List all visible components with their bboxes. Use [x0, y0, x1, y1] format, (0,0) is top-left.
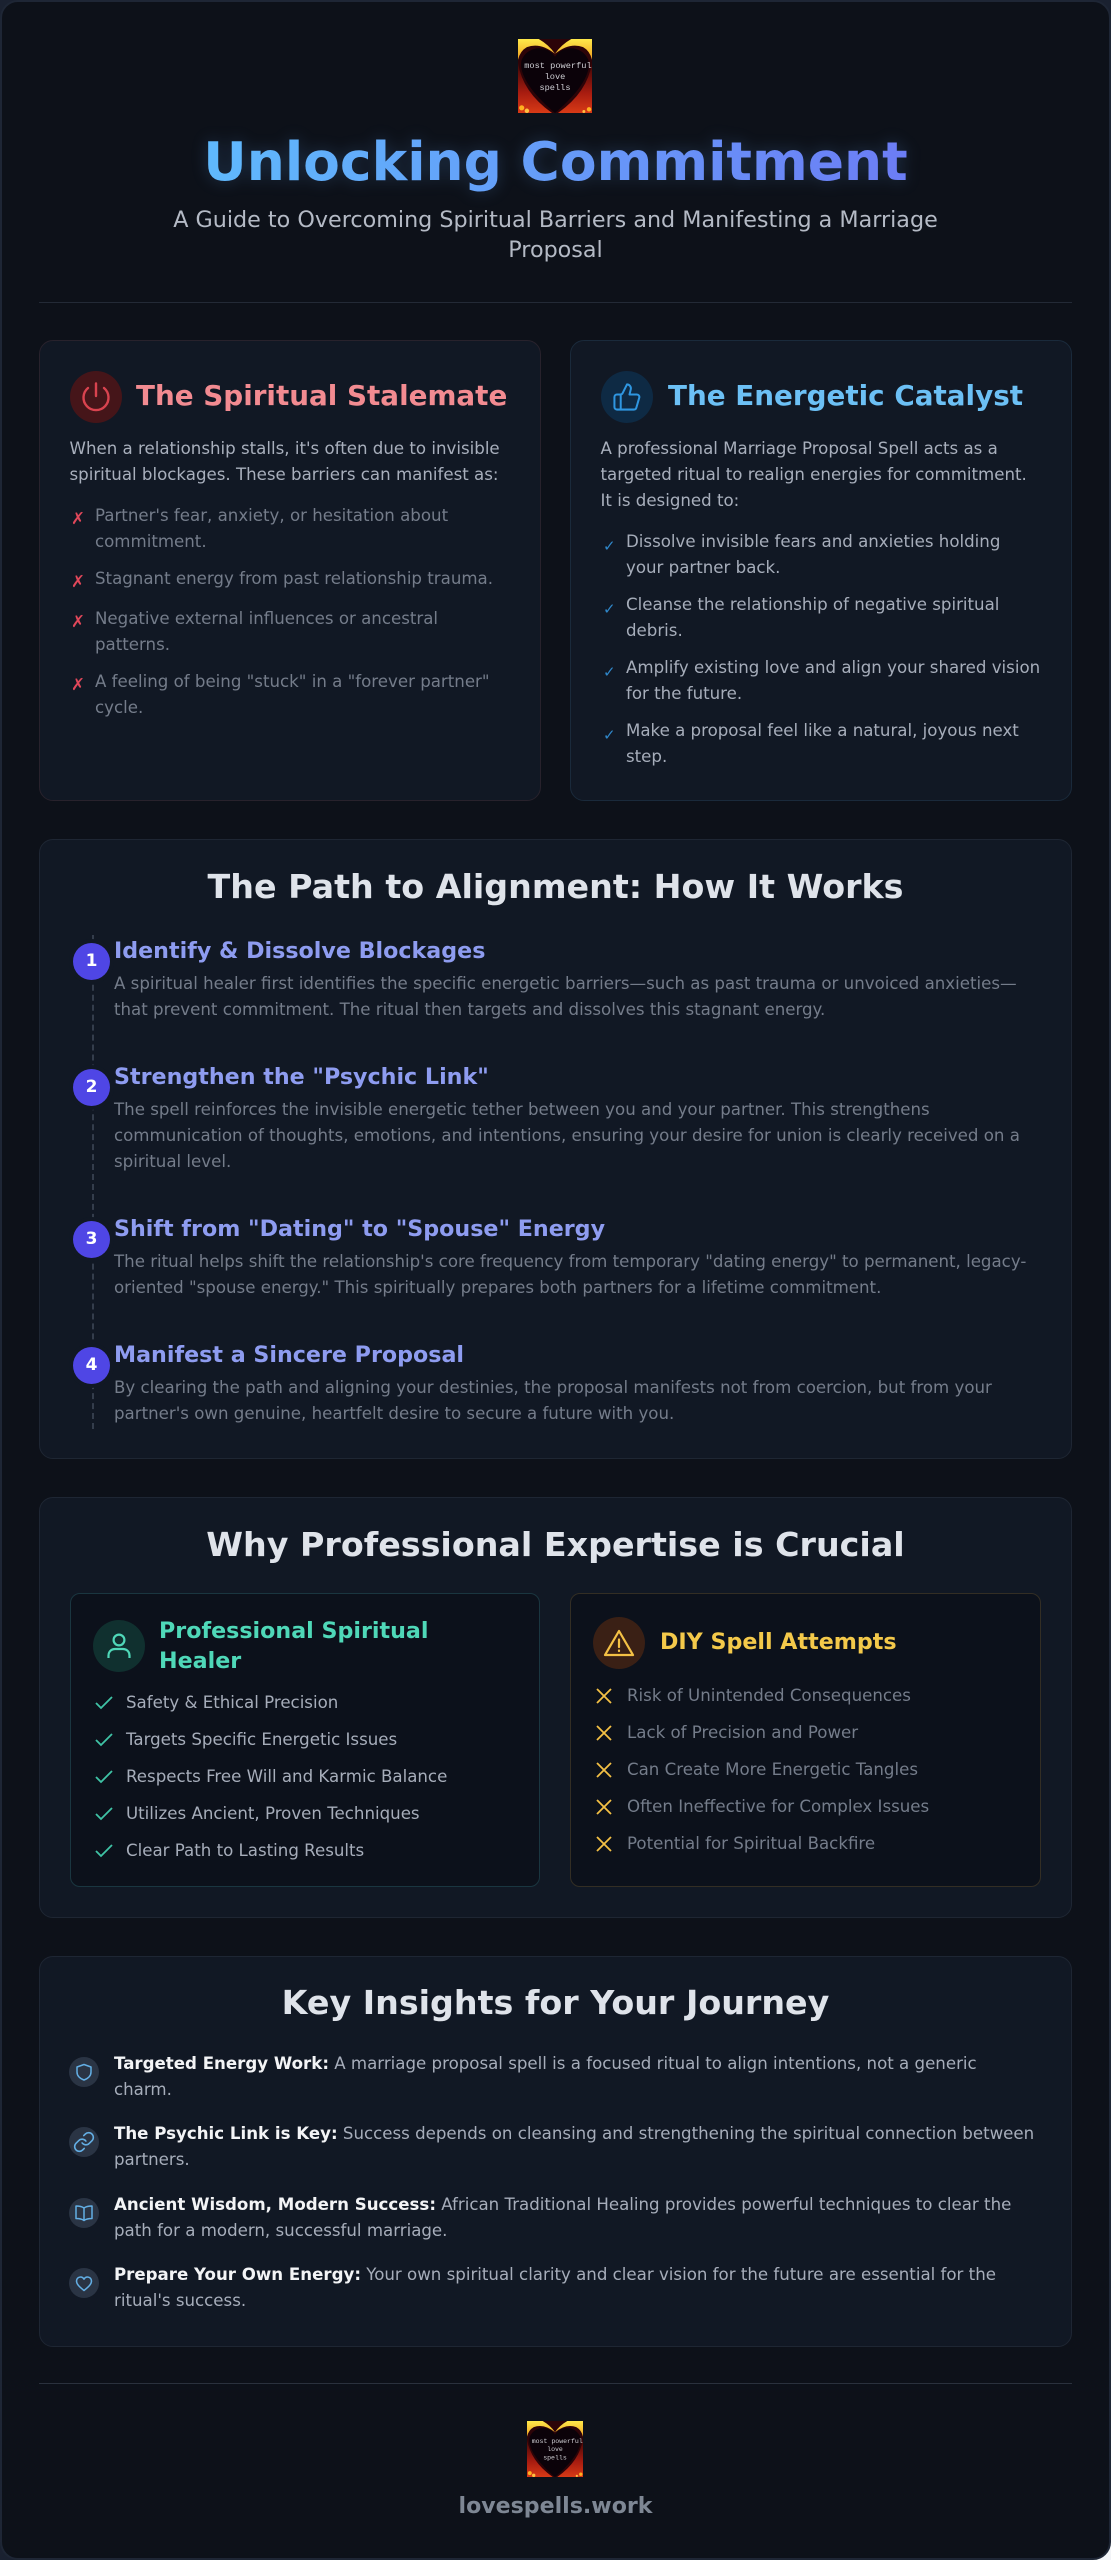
card: diy spell attempts [570, 1593, 1041, 1887]
intro text: stalemate: spiritual blockages. These barriers can manifest as: [70, 465, 498, 484]
step 3 [73, 1216, 1026, 1297]
step 3: oriented "spouse energy." This spiritually prepares both partners for a lifetime commitment. [114, 1278, 881, 1297]
insight 4 [69, 2265, 996, 2310]
insight 4: ritual's success. [114, 2291, 246, 2310]
insight 1: Targeted Energy Work: A marriage proposal spell is a focused ritual to align intentions, not a generic [114, 2054, 977, 2073]
logo: footer [527, 2421, 583, 2477]
logo: footer: spells [543, 2455, 567, 2462]
step 2: 2 [86, 1077, 97, 1097]
list: benefits: step. [626, 747, 667, 766]
intro text: stalemate: When a relationship stalls, it's often due to invisible [70, 439, 500, 458]
intro text: catalyst: It is designed to: [600, 491, 739, 510]
timeline line [92, 935, 94, 1429]
heading: path to alignment: The Path to Alignment: How It Works [208, 867, 903, 906]
heading: diy attempts: DIY Spell Attempts [660, 1629, 897, 1655]
list: barriers [71, 506, 493, 717]
logo: top: love [545, 72, 565, 82]
heading: the spiritual stalemate: The Spiritual Stalemate [136, 379, 507, 412]
list: healer benefits: Utilizes Ancient, Proven Techniques [126, 1804, 420, 1823]
list: barriers: ✗ [71, 572, 85, 591]
list: barriers: ✗ [71, 509, 85, 528]
heading: professional expertise: Why Professional Expertise is Crucial [206, 1525, 905, 1564]
insight 3: path for a modern, successful marriage. [114, 2221, 447, 2240]
list: benefits [603, 532, 1040, 766]
insight 2: partners. [114, 2150, 190, 2169]
list: barriers: Partner's fear, anxiety, or hesitation about [95, 506, 448, 525]
list: benefits: ✓ [603, 663, 616, 681]
insight 1: charm. [114, 2080, 172, 2099]
panel: the energetic catalyst [570, 340, 1072, 801]
list: benefits: for the future. [626, 684, 742, 703]
step 2: communication of thoughts, emotions, and intentions, ensuring your desire for union is clearly received on a [114, 1126, 1020, 1145]
logo: footer: most powerful [532, 2438, 583, 2445]
step 4: partner's own genuine, heartfelt desire to secure a future with you. [114, 1404, 674, 1423]
heading: professional healer [159, 1618, 429, 1674]
list: diy risks: Potential for Spiritual Backfire [627, 1834, 875, 1853]
list: barriers: A feeling of being "stuck" in a "forever partner" [95, 672, 490, 691]
list: barriers: commitment. [95, 532, 207, 551]
step 4 [73, 1342, 992, 1423]
list: benefits: ✓ [603, 600, 616, 618]
subtitle: A Guide to Overcoming Spiritual Barriers and Manifesting a Marriage [173, 207, 938, 233]
logo: top: spells [539, 83, 571, 93]
footer site name: lovespells.work [459, 2493, 652, 2519]
intro text: catalyst: targeted ritual to realign energies for commitment. [600, 465, 1027, 484]
list: diy risks: Lack of Precision and Power [627, 1723, 858, 1742]
step 4: Manifest a Sincere Proposal [114, 1342, 464, 1368]
list: diy risks: Risk of Unintended Consequences [627, 1686, 911, 1705]
step 1: Identify & Dissolve Blockages [114, 938, 485, 964]
list: diy risks: Often Ineffective for Complex Issues [627, 1797, 929, 1816]
step 2 [73, 1064, 1020, 1171]
heading: the energetic catalyst: The Energetic Catalyst [668, 379, 1023, 412]
list: benefits: Amplify existing love and align your shared vision [626, 658, 1040, 677]
subtitle [173, 207, 938, 263]
intro text: stalemate [70, 439, 500, 484]
panel: the path to alignment [39, 839, 1072, 1459]
step 1: 1 [86, 951, 97, 971]
step 4: By clearing the path and aligning your destinies, the proposal manifests not from coercion, but from your [114, 1378, 992, 1397]
list: healer benefits [95, 1693, 447, 1860]
step 4: 4 [86, 1355, 97, 1375]
logo: top: most powerful [524, 61, 592, 71]
step 1: that prevent commitment. The ritual then targets and dissolves this stagnant energy. [114, 1000, 825, 1019]
step 1: A spiritual healer first identifies the specific energetic barriers—such as past trauma or unvoiced anxieties— [114, 974, 1017, 993]
list: barriers: ✗ [71, 675, 85, 694]
intro text: catalyst [600, 439, 1027, 510]
list: barriers: Stagnant energy from past relationship trauma. [95, 569, 493, 588]
insight 4: Prepare Your Own Energy: Your own spiritual clarity and clear vision for the future are essential for the [114, 2265, 996, 2284]
list: diy risks: Can Create More Energetic Tangles [627, 1760, 918, 1779]
title: Unlocking Commitment [203, 130, 908, 193]
insight 2 [69, 2124, 1034, 2169]
heading: professional healer: Healer [159, 1648, 241, 1674]
list: barriers: patterns. [95, 635, 170, 654]
step 3: 3 [86, 1229, 97, 1249]
icon: power [70, 371, 122, 423]
list: barriers: Negative external influences or ancestral [95, 609, 438, 628]
logo: footer: love [547, 2446, 563, 2453]
panel: why professional expertise is crucial [39, 1497, 1072, 1918]
subtitle: Proposal [508, 237, 603, 263]
list: benefits: debris. [626, 621, 683, 640]
list: benefits: Make a proposal feel like a natural, joyous next [626, 721, 1019, 740]
list: benefits: Dissolve invisible fears and anxieties holding [626, 532, 1000, 551]
step 2: spiritual level. [114, 1152, 231, 1171]
intro text: catalyst: A professional Marriage Proposal Spell acts as a [600, 439, 998, 458]
panel: the spiritual stalemate [39, 340, 541, 801]
list: benefits: ✓ [603, 726, 616, 744]
list: healer benefits: Targets Specific Energetic Issues [126, 1730, 397, 1749]
insight 3 [69, 2195, 1011, 2240]
step 2: Strengthen the "Psychic Link" [114, 1064, 489, 1090]
icon: user [93, 1620, 145, 1672]
step 3: Shift from "Dating" to "Spouse" Energy [114, 1216, 605, 1242]
icon: thumbs up [601, 371, 653, 423]
logo: top [518, 39, 592, 113]
list: benefits: Cleanse the relationship of negative spiritual [626, 595, 999, 614]
step 2: The spell reinforces the invisible energetic tether between you and your partner. This strengthens [114, 1100, 930, 1119]
insight 1 [69, 2054, 977, 2099]
card: professional spiritual healer [70, 1593, 540, 1887]
step 1 [73, 938, 1017, 1019]
insight 2: The Psychic Link is Key: Success depends on cleansing and strengthening the spiritual connection between [114, 2124, 1034, 2143]
heading: professional healer: Professional Spiritual [159, 1618, 429, 1644]
list: benefits: ✓ [603, 537, 616, 555]
list: healer benefits: Clear Path to Lasting Results [126, 1841, 364, 1860]
icon: warning [593, 1617, 645, 1669]
list: barriers: ✗ [71, 612, 85, 631]
insight 3: Ancient Wisdom, Modern Success: African Traditional Healing provides powerful techniques to clear the [114, 2195, 1011, 2214]
list: diy risks [596, 1686, 929, 1853]
step 3: The ritual helps shift the relationship's core frequency from temporary "dating energy" to permanent, legacy- [114, 1252, 1026, 1271]
panel: key insights [39, 1956, 1072, 2347]
bottom-right page corner [1090, 2540, 1111, 2560]
list: barriers: cycle. [95, 698, 143, 717]
list: healer benefits: Safety & Ethical Precision [126, 1693, 338, 1712]
list: healer benefits: Respects Free Will and Karmic Balance [126, 1767, 447, 1786]
list: benefits: your partner back. [626, 558, 780, 577]
heading: key insights: Key Insights for Your Journey [282, 1983, 829, 2022]
